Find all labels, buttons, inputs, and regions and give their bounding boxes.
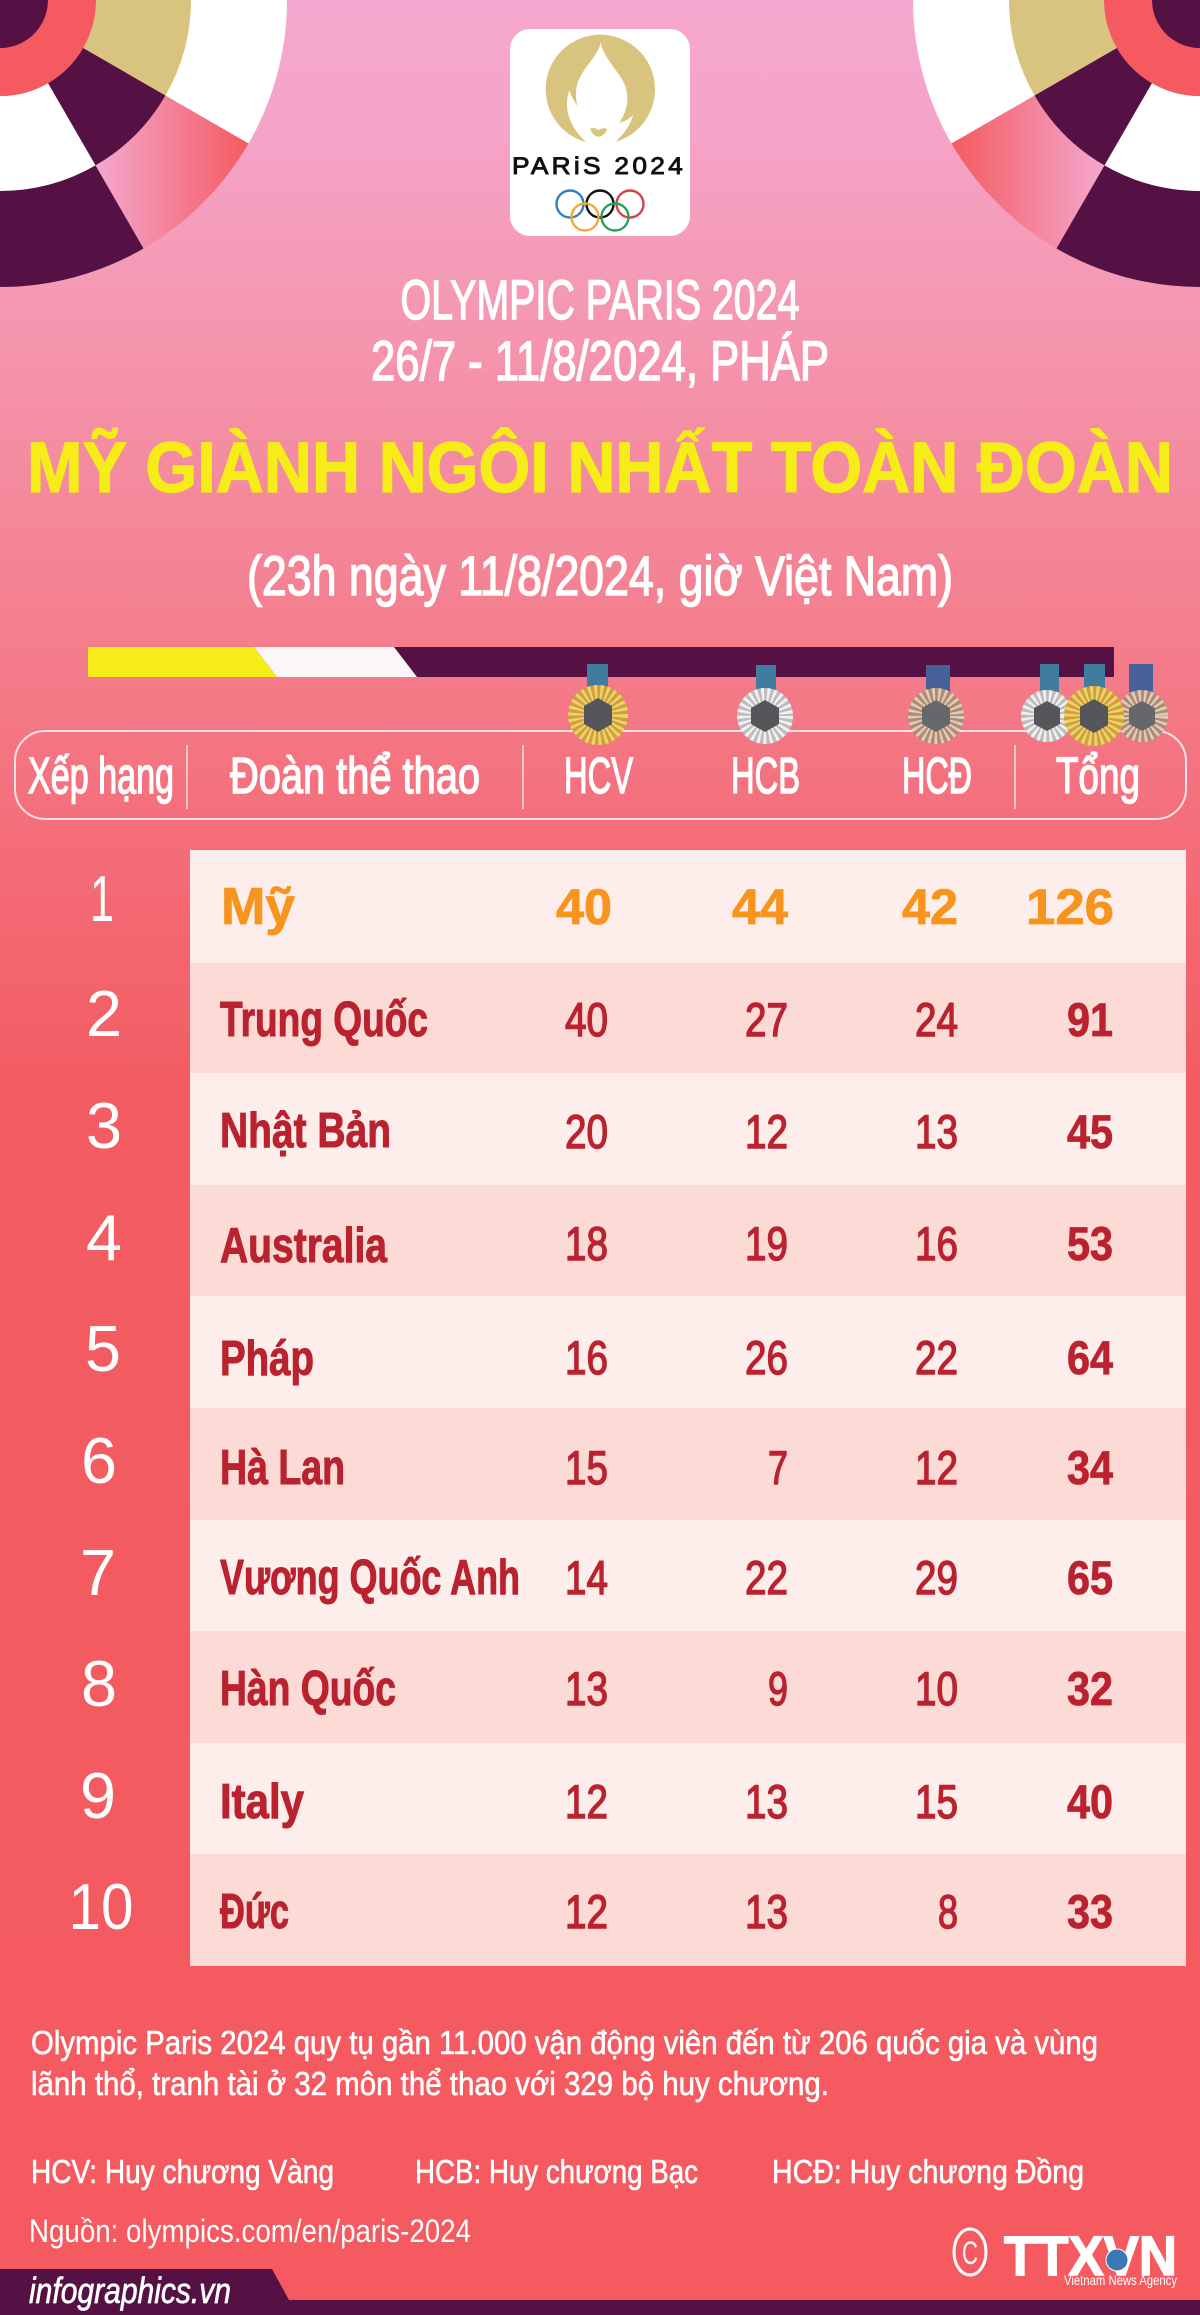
note paragraph: lãnh thổ, tranh tài ở 32 môn thể thao với 329 bộ huy chương.: [31, 2065, 829, 2102]
row 4: Australia: 19: [745, 1217, 788, 1270]
row 5: Pháp: Pháp: [220, 1332, 314, 1386]
icon: silver medal: [737, 665, 793, 744]
row 10: Đức: 12: [565, 1885, 608, 1938]
row 2: Trung Quốc: 40: [565, 993, 608, 1046]
row 7: Vương Quốc Anh: 14: [565, 1551, 608, 1604]
row 7: Vương Quốc Anh: 29: [915, 1551, 958, 1604]
row 10: Đức: [68, 1854, 1186, 1966]
row 6: Hà Lan: 6: [81, 1424, 117, 1497]
header: team: Đoàn thể thao: [230, 747, 480, 804]
heading: event dates: 26/7 - 11/8/2024, PHÁP: [371, 329, 829, 392]
wordmark: PARiS 2024: [512, 153, 686, 180]
row 9: Italy: 12: [565, 1775, 608, 1828]
row 7: Vương Quốc Anh: [80, 1520, 1186, 1631]
row 7: Vương Quốc Anh: Vương Quốc Anh: [220, 1551, 520, 1605]
row 1: Mỹ: 1: [90, 862, 114, 935]
row 3: Nhật Bản: [86, 1073, 1186, 1185]
row 1: Mỹ: 42: [902, 879, 958, 935]
row 7: Vương Quốc Anh: 22: [745, 1551, 788, 1604]
icon: medal trio for total: [1021, 664, 1168, 746]
decoration: top-right quarter circle: [913, 0, 1200, 287]
row 9: Italy: 13: [745, 1775, 788, 1828]
row 6: Hà Lan: [81, 1408, 1186, 1520]
icon: flame and face emblem: [546, 35, 655, 146]
row 8: Hàn Quốc: 9: [768, 1662, 788, 1715]
row 10: Đức: 8: [938, 1885, 958, 1938]
row 10: Đức: Đức: [220, 1885, 289, 1939]
row 9: Italy: 9: [80, 1759, 116, 1832]
row 9: Italy: 40: [1067, 1775, 1113, 1828]
row 10: Đức: 13: [745, 1885, 788, 1938]
row 2: Trung Quốc: [86, 963, 1186, 1073]
heading: event name: OLYMPIC PARIS 2024: [400, 268, 800, 331]
row 8: Hàn Quốc: Hàn Quốc: [220, 1662, 396, 1716]
row 1: Mỹ: 126: [1026, 879, 1114, 935]
website: infographics.vn: [29, 2270, 231, 2311]
logo: TTXVN: TTXVN: [1004, 2224, 1177, 2287]
row 8: Hàn Quốc: [81, 1631, 1186, 1743]
header: silver: HCB: [731, 747, 800, 804]
legend: HCV: Huy chương Vàng: [31, 2153, 334, 2190]
row 5: Pháp: 22: [915, 1331, 958, 1384]
table header: [15, 731, 1186, 819]
row 1: Mỹ: 44: [732, 879, 788, 935]
row 2: Trung Quốc: 2: [86, 977, 122, 1050]
row 2: Trung Quốc: Trung Quốc: [220, 993, 428, 1047]
footer band: [0, 2269, 1200, 2315]
row 10: Đức: 10: [68, 1870, 134, 1943]
decoration: top-left quarter circle: [0, 0, 287, 287]
row 4: Australia: 18: [565, 1217, 608, 1270]
row 1: Mỹ: 40: [556, 879, 612, 935]
row 4: Australia: 16: [915, 1217, 958, 1270]
row 2: Trung Quốc: 27: [745, 993, 788, 1046]
legend: HCB: Huy chương Bạc: [415, 2153, 698, 2190]
row 3: Nhật Bản: 3: [86, 1089, 122, 1162]
note paragraph: Olympic Paris 2024 quy tụ gần 11.000 vận động viên đến từ 206 quốc gia và vùng: [31, 2024, 1098, 2061]
row 6: Hà Lan: 34: [1067, 1441, 1113, 1494]
logo: Paris 2024: [510, 29, 690, 236]
note paragraph: [31, 2024, 1098, 2102]
row 10: Đức: 33: [1067, 1885, 1113, 1938]
row 8: Hàn Quốc: 10: [915, 1662, 958, 1715]
row 8: Hàn Quốc: 8: [81, 1647, 117, 1720]
header: gold: HCV: [564, 747, 633, 804]
row 5: Pháp: 5: [85, 1312, 121, 1385]
row 7: Vương Quốc Anh: 65: [1067, 1551, 1113, 1604]
row 4: Australia: [86, 1185, 1186, 1296]
header: bronze: HCĐ: [902, 747, 972, 804]
legend: [31, 2153, 1084, 2190]
row 6: Hà Lan: 15: [565, 1441, 608, 1494]
row 3: Nhật Bản: Nhật Bản: [220, 1104, 391, 1158]
header: total: Tổng: [1056, 747, 1140, 804]
row 4: Australia: 4: [86, 1201, 122, 1274]
row 4: Australia: Australia: [220, 1219, 388, 1273]
row 3: Nhật Bản: 45: [1067, 1105, 1113, 1158]
row 2: Trung Quốc: 91: [1067, 993, 1113, 1046]
medal table: [68, 850, 1186, 1966]
row 6: Hà Lan: 12: [915, 1441, 958, 1494]
row 2: Trung Quốc: 24: [915, 993, 958, 1046]
row 8: Hàn Quốc: 32: [1067, 1662, 1113, 1715]
source: Nguồn: olympics.com/en/paris-2024: [29, 2213, 471, 2249]
row 5: Pháp: 16: [565, 1331, 608, 1384]
row 3: Nhật Bản: 12: [745, 1105, 788, 1158]
row 5: Pháp: 26: [745, 1331, 788, 1384]
logo: TTXVN: Vietnam News Agency: [1064, 2272, 1177, 2288]
row 7: Vương Quốc Anh: 7: [80, 1536, 116, 1609]
logo: TTXVN: C: [962, 2235, 978, 2271]
ribbon bar: [88, 647, 1114, 677]
row 3: Nhật Bản: 20: [565, 1105, 608, 1158]
row 3: Nhật Bản: 13: [915, 1105, 958, 1158]
row 5: Pháp: 64: [1067, 1331, 1113, 1384]
subtitle: timestamp: (23h ngày 11/8/2024, giờ Việt Nam): [247, 544, 953, 607]
row 9: Italy: 15: [915, 1775, 958, 1828]
row 1: Mỹ: [90, 850, 1186, 963]
row 4: Australia: 53: [1067, 1217, 1113, 1270]
row 6: Hà Lan: Hà Lan: [220, 1441, 345, 1495]
row 8: Hàn Quốc: 13: [565, 1662, 608, 1715]
legend: HCĐ: Huy chương Đồng: [772, 2153, 1084, 2190]
row 1: Mỹ: Mỹ: [221, 878, 295, 936]
icon: bronze medal: [908, 665, 964, 744]
row 6: Hà Lan: 7: [768, 1441, 788, 1494]
icon: gold medal: [568, 664, 628, 745]
row 9: Italy: Italy: [220, 1775, 304, 1829]
row 5: Pháp: [85, 1296, 1186, 1408]
icon: olympic rings: [556, 190, 644, 230]
header: rank: Xếp hạng: [28, 747, 174, 804]
row 9: Italy: [80, 1743, 1186, 1854]
